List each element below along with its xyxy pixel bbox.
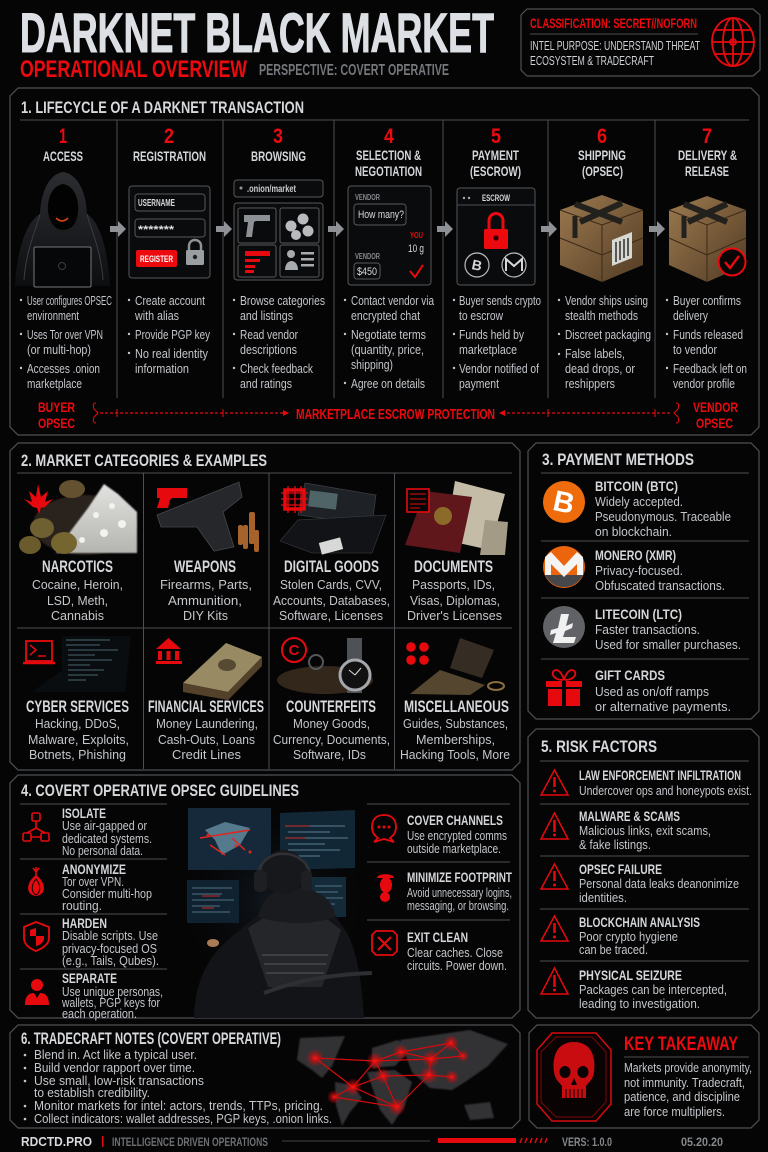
right guideline text: messaging, or browsing. bbox=[407, 899, 509, 913]
tradecraft bullet list: Build vendor rapport over time. bbox=[34, 1061, 195, 1075]
category labels row one: DIGITAL GOODS bbox=[284, 557, 379, 576]
step numbers: 4 bbox=[384, 125, 394, 148]
icon: escrow payment window: B bbox=[470, 256, 484, 274]
step numbers bbox=[59, 125, 712, 148]
icon: escrow payment window bbox=[457, 188, 535, 285]
category labels row two: Money Laundering, bbox=[156, 717, 258, 731]
header title block bbox=[20, 1, 494, 83]
footer: 05.20.20 bbox=[681, 1137, 723, 1149]
step bullet lists: reshippers bbox=[565, 377, 615, 391]
icon: bank bbox=[156, 638, 182, 664]
step bullet lists: Buyer sends crypto bbox=[459, 294, 541, 308]
footer: RDCTD.PRO bbox=[21, 1134, 92, 1149]
icon: registration form: ******* bbox=[138, 224, 175, 236]
step numbers: 7 bbox=[702, 125, 712, 148]
category labels row two: COUNTERFEITS bbox=[286, 697, 376, 716]
step bullet lists: and ratings bbox=[240, 377, 292, 391]
category labels row two: Cash-Outs, Loans bbox=[158, 733, 255, 747]
panel: covert operative opsec guidelines bbox=[10, 775, 520, 1021]
icon: registration form: USERNAME bbox=[138, 198, 175, 209]
payment text: MONERO (XMR) bbox=[595, 547, 676, 563]
step titles: ACCESS bbox=[43, 148, 83, 164]
tradecraft bullet list: Collect indicators: wallet addresses, PGP keys, .onion links. bbox=[34, 1112, 332, 1126]
category labels row one: Visas, Diplomas, bbox=[410, 594, 500, 608]
step bullet lists: dead drops, or bbox=[565, 362, 635, 376]
step bullet lists: (quantity, price, bbox=[351, 343, 424, 357]
footer: INTELLIGENCE DRIVEN OPERATIONS bbox=[112, 1137, 268, 1149]
tradecraft bullet list bbox=[24, 1048, 332, 1126]
step bullet lists: stealth methods bbox=[565, 309, 638, 323]
risk text: BLOCKCHAIN ANALYSIS bbox=[579, 914, 700, 930]
panel: key takeaway bbox=[529, 1025, 759, 1128]
category labels row two: MISCELLANEOUS bbox=[404, 697, 509, 716]
left guideline text: Use unique personas, bbox=[62, 985, 163, 999]
category labels row two: Botnets, Phishing bbox=[29, 748, 126, 762]
category labels row one: LSD, Meth, bbox=[47, 594, 108, 608]
icon: chat negotiation: VENDOR bbox=[355, 193, 380, 202]
payment text: LITECOIN (LTC) bbox=[595, 606, 682, 622]
right guideline text bbox=[407, 812, 512, 973]
step bullet lists: information bbox=[135, 362, 189, 376]
step bullet lists: Browse categories bbox=[240, 294, 325, 308]
step titles: SHIPPING bbox=[578, 147, 626, 163]
step bullet lists: Accesses .onion bbox=[27, 362, 100, 376]
category: miscellaneous image bbox=[406, 638, 504, 695]
icon: market browser bbox=[234, 180, 323, 280]
payment text: Used for smaller purchases. bbox=[595, 638, 741, 652]
left guideline text: Tor over VPN. bbox=[62, 875, 124, 889]
step bullet lists: Read vendor bbox=[240, 328, 298, 342]
icon: chat negotiation: $450 bbox=[357, 266, 377, 278]
step bullet lists: Create account bbox=[135, 294, 205, 308]
step bullet lists: Provide PGP key bbox=[135, 328, 211, 342]
left guideline text: HARDEN bbox=[62, 915, 107, 931]
left guideline text: SEPARATE bbox=[62, 970, 117, 986]
footer bbox=[21, 1134, 723, 1149]
title: DARKNET BLACK MARKET bbox=[20, 1, 494, 64]
escrow protection bar: MARKETPLACE ESCROW PROTECTION bbox=[296, 406, 495, 423]
payment text: BITCOIN (BTC) bbox=[595, 478, 678, 494]
icon: market browser: .onion/market bbox=[247, 184, 296, 195]
payment text: or alternative payments. bbox=[595, 700, 731, 714]
category: weapons image bbox=[157, 482, 259, 552]
category labels row one: Cocaine, Heroin, bbox=[32, 578, 123, 592]
icon: chat bubble bbox=[372, 815, 396, 842]
heading: section 3: 3. PAYMENT METHODS bbox=[542, 450, 694, 469]
icon: circuit chip bbox=[281, 486, 308, 513]
left guideline text bbox=[61, 805, 163, 1021]
arrows between steps bbox=[110, 221, 665, 237]
payment text: Widely accepted. bbox=[595, 495, 683, 509]
payment text: Faster transactions. bbox=[595, 623, 700, 637]
takeaway text: patience, and discipline bbox=[624, 1090, 740, 1104]
category labels row one: WEAPONS bbox=[174, 557, 236, 576]
icon: registration form: REGISTER bbox=[140, 254, 173, 264]
subtitle: OPERATIONAL OVERVIEW bbox=[20, 56, 247, 83]
left guideline text: No personal data. bbox=[62, 844, 143, 858]
risk text: MALWARE & SCAMS bbox=[579, 808, 680, 824]
step numbers: 5 bbox=[491, 125, 501, 148]
step titles: RELEASE bbox=[685, 163, 729, 179]
step bullet lists: Funds held by bbox=[459, 328, 525, 342]
panel: classification: INTEL PURPOSE: UNDERSTAND THREAT bbox=[530, 39, 700, 53]
right guideline text: Avoid unnecessary logins, bbox=[407, 886, 512, 900]
step bullet lists: Check feedback bbox=[240, 362, 314, 376]
step bullet lists: and listings bbox=[240, 309, 293, 323]
payment text: Obfuscated transactions. bbox=[595, 579, 725, 593]
step titles: BROWSING bbox=[251, 148, 306, 164]
heading: section 1: 1. LIFECYCLE OF A DARKNET TRANSACTION bbox=[21, 98, 304, 117]
step titles bbox=[43, 147, 737, 179]
category labels row two: Credit Lines bbox=[172, 748, 241, 762]
risk text: leading to investigation. bbox=[579, 997, 700, 1011]
step bullet lists: vendor profile bbox=[673, 377, 735, 391]
payment text bbox=[595, 478, 741, 714]
icon: id document bbox=[407, 489, 429, 512]
icon: four dots bbox=[406, 642, 429, 665]
left guideline text: ANONYMIZE bbox=[62, 861, 126, 877]
icon: isolate network bbox=[23, 813, 49, 841]
step bullet lists: encrypted chat bbox=[351, 309, 420, 323]
icon: globe bbox=[712, 18, 754, 66]
step titles: (ESCROW) bbox=[470, 163, 521, 179]
category labels row one: DIY Kits bbox=[183, 609, 228, 623]
icon: copyright: C bbox=[289, 642, 300, 659]
risk text: identities. bbox=[579, 891, 627, 905]
category labels row two: Hacking Tools, More bbox=[400, 748, 510, 762]
panel: classification: ECOSYSTEM & TRADECRAFT bbox=[530, 54, 654, 68]
step bullet lists: Funds released bbox=[673, 328, 743, 342]
step bullet lists: with alias bbox=[134, 309, 179, 323]
step bullet lists: Contact vendor via bbox=[351, 294, 434, 308]
step titles: DELIVERY & bbox=[678, 147, 737, 163]
category labels row two: Money Goods, bbox=[293, 717, 370, 731]
risk text: Malicious links, exit scams, bbox=[579, 824, 711, 838]
category labels row two bbox=[26, 697, 510, 762]
risk text: PHYSICAL SEIZURE bbox=[579, 967, 682, 983]
right guideline text: Use encrypted comms bbox=[407, 829, 507, 843]
panel: payment methods bbox=[528, 443, 759, 719]
step bullet lists: False labels, bbox=[565, 347, 625, 361]
icon: chat negotiation: VENDOR bbox=[355, 252, 380, 261]
icon: litecoin bbox=[543, 606, 585, 648]
category labels row one: DOCUMENTS bbox=[414, 557, 493, 576]
step titles: PAYMENT bbox=[472, 147, 519, 163]
takeaway text: are force multipliers. bbox=[624, 1105, 725, 1119]
step bullet lists bbox=[20, 294, 747, 391]
category: documents image bbox=[405, 481, 508, 555]
step bullet lists: payment bbox=[459, 377, 499, 391]
icon: person bbox=[25, 979, 49, 1005]
risk text: can be traced. bbox=[579, 943, 648, 957]
step numbers: 1 bbox=[59, 125, 67, 148]
tradecraft bullet list: Monitor markets for intel: actors, trends, TTPs, pricing. bbox=[34, 1099, 323, 1113]
left guideline text: Use air-gapped or bbox=[62, 819, 147, 833]
step bullet lists: Negotiate terms bbox=[351, 328, 426, 342]
tradecraft bullet list: Use small, low-risk transactions bbox=[34, 1074, 204, 1088]
icon: footprint bbox=[377, 874, 394, 902]
heading: section 2: 2. MARKET CATEGORIES & EXAMPLES bbox=[21, 451, 267, 470]
category labels row two: Currency, Documents, bbox=[273, 733, 390, 747]
takeaway text bbox=[624, 1061, 752, 1119]
right guideline text: Clear caches. Close bbox=[407, 946, 503, 960]
tradecraft bullet list: Blend in. Act like a typical user. bbox=[34, 1048, 197, 1062]
left guideline text: (e.g., Tails, Qubes). bbox=[62, 954, 159, 968]
step titles: REGISTRATION bbox=[133, 148, 206, 164]
step bullet lists: delivery bbox=[673, 309, 709, 323]
step bullet lists: shipping) bbox=[351, 358, 393, 372]
heading: section 5: 5. RISK FACTORS bbox=[541, 737, 657, 756]
category labels row one: Firearms, Parts, bbox=[160, 578, 252, 592]
icon: exit x box bbox=[372, 931, 397, 955]
category labels row one: Passports, IDs, bbox=[412, 578, 495, 592]
icon: skull emblem bbox=[537, 1033, 611, 1121]
right guideline text: circuits. Power down. bbox=[407, 959, 507, 973]
escrow protection bar: OPSEC bbox=[38, 415, 75, 431]
category labels row two: Guides, Substances, bbox=[403, 717, 508, 731]
step numbers: 6 bbox=[597, 125, 607, 148]
panel: tradecraft notes bbox=[10, 1025, 520, 1128]
takeaway text: not immunity. Tradecraft, bbox=[624, 1076, 745, 1090]
left guideline text: dedicated systems. bbox=[62, 832, 152, 846]
payment text: on blockchain. bbox=[595, 525, 672, 539]
step bullet lists: descriptions bbox=[240, 343, 297, 357]
left guideline text: Consider multi-hop bbox=[62, 887, 152, 901]
tradecraft bullet list: to establish credibility. bbox=[34, 1086, 150, 1100]
left guideline text: wallets, PGP keys for bbox=[61, 996, 160, 1010]
escrow protection bar: BUYER bbox=[38, 399, 75, 415]
category labels row two: Memberships, bbox=[416, 733, 495, 747]
category: cyber services image bbox=[23, 636, 131, 692]
payment text: Used as on/off ramps bbox=[595, 685, 709, 699]
icon: gift bbox=[546, 670, 582, 706]
category: narcotics image bbox=[19, 480, 137, 555]
step bullet lists: to escrow bbox=[459, 309, 504, 323]
icon: chat negotiation: YOU bbox=[410, 230, 423, 240]
step bullet lists: marketplace bbox=[27, 377, 82, 391]
payment text: Privacy-focused. bbox=[595, 564, 683, 578]
step numbers: 3 bbox=[273, 125, 283, 148]
category: financial services image bbox=[156, 638, 262, 700]
icon: terminal bbox=[23, 641, 55, 663]
step bullet lists: Uses Tor over VPN bbox=[27, 328, 103, 342]
step bullet lists: Feedback left on bbox=[673, 362, 747, 376]
category labels row two: Hacking, DDoS, bbox=[35, 717, 120, 731]
risk text: Personal data leaks deanonimize bbox=[579, 877, 739, 891]
left guideline text: each operation. bbox=[62, 1007, 137, 1021]
step bullet lists: Vendor notified of bbox=[459, 362, 539, 376]
risk text: OPSEC FAILURE bbox=[579, 861, 662, 877]
icon: registration form bbox=[129, 186, 210, 278]
left guideline text: routing. bbox=[62, 899, 102, 913]
step bullet lists: Vendor ships using bbox=[565, 294, 648, 308]
step bullet lists: (or multi-hop) bbox=[27, 343, 91, 357]
risk text: Poor crypto hygiene bbox=[579, 930, 678, 944]
escrow protection bar: VENDOR bbox=[693, 399, 738, 415]
icon: chat negotiation bbox=[348, 186, 431, 285]
step bullet lists: environment bbox=[27, 309, 79, 323]
category labels row one: NARCOTICS bbox=[42, 557, 113, 576]
perspective label: PERSPECTIVE: COVERT OPERATIVE bbox=[259, 62, 449, 79]
heading: section 4: 4. COVERT OPERATIVE OPSEC GUIDELINES bbox=[21, 781, 299, 800]
right guideline text: MINIMIZE FOOTPRINT bbox=[407, 869, 512, 885]
risk text bbox=[579, 767, 752, 1011]
step titles: SELECTION & bbox=[356, 147, 421, 163]
panel: risk factors bbox=[528, 729, 759, 1018]
panel: classification bbox=[521, 9, 760, 76]
category labels row one bbox=[32, 557, 502, 623]
left guideline text: privacy-focused OS bbox=[62, 942, 157, 956]
risk text: & fake listings. bbox=[579, 838, 651, 852]
icon: hooded figure with laptop bbox=[15, 172, 110, 287]
step bullet lists: to vendor bbox=[673, 343, 717, 357]
step bullet lists: User configures OPSEC bbox=[27, 294, 112, 308]
illustration: operative at monitors bbox=[172, 800, 372, 1018]
category labels row one: Accounts, Databases, bbox=[273, 594, 390, 608]
panel: market categories and examples bbox=[10, 443, 520, 770]
heading: section 6: 6. TRADECRAFT NOTES (COVERT OPERATIVE) bbox=[21, 1029, 281, 1048]
panel: lifecycle of a darknet transaction bbox=[10, 88, 759, 435]
category labels row two: Software, IDs bbox=[293, 748, 366, 762]
right guideline text: EXIT CLEAN bbox=[407, 929, 468, 945]
icon: onion bbox=[28, 867, 44, 896]
icon: pistol bbox=[157, 488, 187, 508]
right guideline text: COVER CHANNELS bbox=[407, 812, 503, 828]
category labels row two: CYBER SERVICES bbox=[26, 697, 129, 716]
payment text: Pseudonymous. Traceable bbox=[595, 510, 731, 524]
icon: chat negotiation: How many? bbox=[358, 209, 404, 221]
category labels row one: Stolen Cards, CVV, bbox=[280, 578, 382, 592]
step numbers: 2 bbox=[164, 125, 174, 148]
icon: shipping boxes bbox=[560, 195, 643, 282]
right guideline text: outside marketplace. bbox=[407, 842, 501, 856]
step titles: NEGOTIATION bbox=[355, 163, 422, 179]
icon: bitcoin bbox=[543, 481, 585, 523]
icon: monero bbox=[543, 546, 585, 588]
map: world network bbox=[297, 1030, 508, 1126]
footer: VERS: 1.0.0 bbox=[562, 1137, 612, 1149]
icons: warning triangles bbox=[541, 770, 568, 994]
step titles: (OPSEC) bbox=[582, 163, 623, 179]
icon: shield bbox=[24, 922, 49, 951]
icon: delivery box and check bbox=[669, 196, 746, 282]
category: digital goods image bbox=[280, 483, 386, 555]
step bullet lists: No real identity bbox=[135, 347, 209, 361]
step bullet lists: Discreet packaging bbox=[565, 328, 651, 342]
step bullet lists: marketplace bbox=[459, 343, 517, 357]
step bullet lists: Agree on details bbox=[351, 377, 425, 391]
icon: bitcoin: B bbox=[550, 485, 577, 521]
left guideline text: ISOLATE bbox=[62, 805, 106, 821]
category: counterfeits image bbox=[277, 638, 373, 694]
icon: escrow payment window: ESCROW bbox=[482, 193, 510, 203]
escrow protection bar bbox=[38, 399, 738, 431]
left guideline text: Disable scripts. Use bbox=[62, 929, 158, 943]
escrow protection bar: OPSEC bbox=[696, 415, 733, 431]
category labels row two: FINANCIAL SERVICES bbox=[148, 697, 264, 716]
risk text: Packages can be intercepted, bbox=[579, 983, 727, 997]
icon: chat negotiation: 10 g bbox=[408, 243, 424, 255]
category labels row one: Software, Licenses bbox=[279, 609, 383, 623]
category labels row one: Cannabis bbox=[51, 609, 104, 623]
category labels row two: Malware, Exploits, bbox=[28, 733, 129, 747]
icon: cannabis leaf bbox=[24, 484, 53, 514]
step bullet lists: Buyer confirms bbox=[673, 294, 741, 308]
category labels row one: Driver's Licenses bbox=[407, 609, 502, 623]
category labels row one: Ammunition, bbox=[168, 594, 242, 608]
payment text: GIFT CARDS bbox=[595, 667, 665, 683]
